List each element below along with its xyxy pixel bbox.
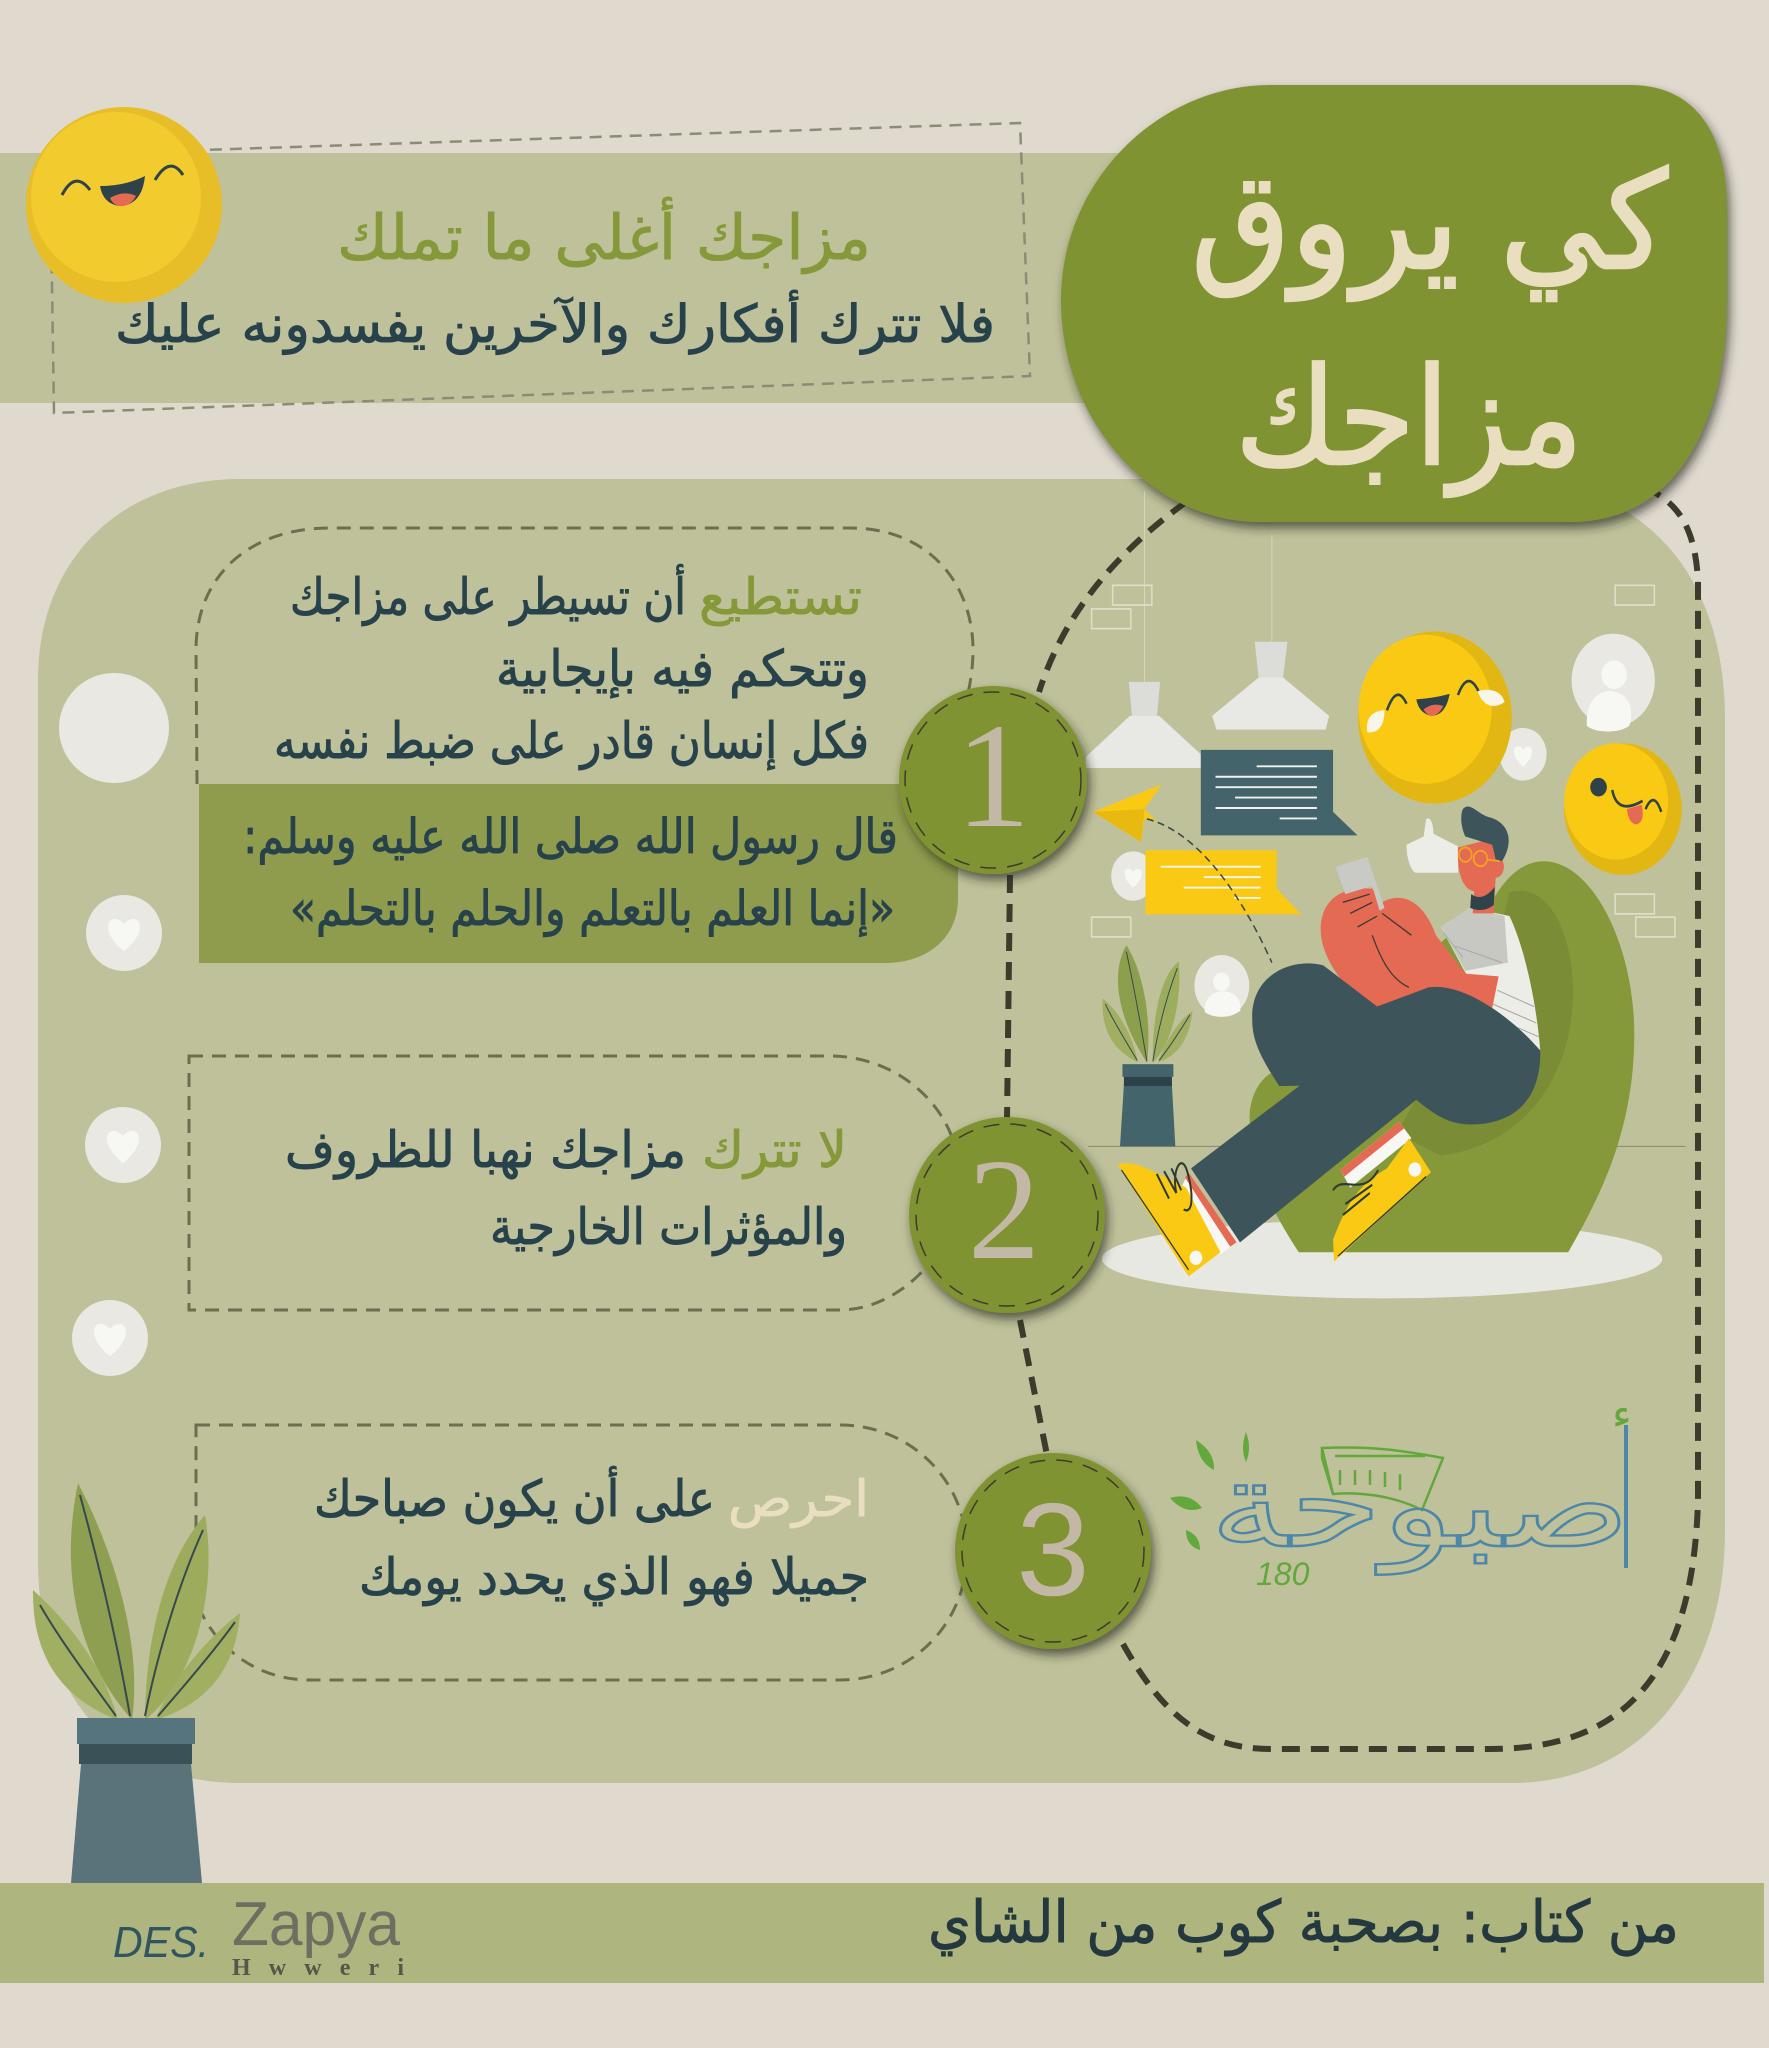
title line 1: كي يروق <box>1191 143 1669 302</box>
footer source text: من كتاب: بصحبة كوب من الشاي <box>928 1888 1679 1957</box>
floor line <box>1088 1145 1686 1147</box>
title line 2: مزاجك <box>1235 339 1583 497</box>
tip 1 highlighted word: تستطيع <box>699 568 862 627</box>
icon: paper plane <box>1093 784 1272 963</box>
icon: laughing emoji large <box>1358 631 1512 804</box>
glasses <box>1459 847 1500 866</box>
man figure <box>1118 807 1540 1276</box>
wall bricks <box>1092 585 1675 937</box>
head <box>1458 839 1504 913</box>
number badge 2 <box>909 1117 1105 1313</box>
icon: laughing emoji top <box>26 107 222 303</box>
tip 1 line 2: وتتحكم فيه بإيجابية <box>496 640 869 699</box>
number badge 2: 2 <box>968 1130 1040 1290</box>
back leg <box>1252 963 1429 1086</box>
icon: winking emoji <box>1564 743 1682 875</box>
tip 1 line 3: فكل إنسان قادر على ضبط نفسه <box>274 712 869 771</box>
logo: Osbouha 180 <box>1170 1389 1632 1592</box>
icon: heart bubble left <box>1111 851 1155 901</box>
side decoration: plain circle <box>59 673 169 783</box>
panel: tip 2 <box>189 1056 960 1310</box>
leaves <box>71 1483 134 1720</box>
logo hamza: ء <box>1612 1389 1632 1438</box>
panel: tip 3 <box>196 1425 967 1680</box>
designer credit: Hwweri <box>232 1955 404 1981</box>
designer credit <box>113 1890 404 1981</box>
icon: profile bubble top <box>1572 634 1655 731</box>
banner heading: مزاجك أغلى ما تملك <box>337 197 871 274</box>
tip 2 highlighted word: لا تترك <box>702 1121 847 1179</box>
tip 3 highlighted word: احرص <box>728 1470 869 1528</box>
logo alef <box>1624 1425 1628 1568</box>
icon: small potted plant <box>1103 945 1192 1146</box>
pot <box>77 1718 195 1744</box>
lamps <box>1086 491 1329 768</box>
tip 3 line 2: جميلا فهو الذي يحدد يومك <box>359 1548 869 1607</box>
tip 2 dashed outline <box>189 1056 960 1310</box>
number badge 3 <box>955 1453 1151 1649</box>
title shape <box>1061 85 1727 522</box>
number badge 3: 3 <box>1016 1476 1090 1623</box>
tip 3 dashed outline <box>196 1425 967 1680</box>
left sock <box>1181 1172 1237 1254</box>
phone <box>1336 857 1384 911</box>
number badge 1: 1 <box>956 693 1030 859</box>
logo number: 180 <box>1256 1556 1310 1592</box>
designer credit: DES. <box>113 1918 209 1967</box>
dashed connector path <box>1007 490 1698 1749</box>
logo book icon <box>1322 1447 1443 1510</box>
tip 1 line 1: أن تسيطر على مزاجك <box>290 564 686 626</box>
panel: hadith quote <box>199 784 958 963</box>
icon: teal speech bubble <box>1201 750 1358 835</box>
front leg <box>1191 987 1540 1242</box>
icon: thumbs up <box>1407 818 1458 873</box>
designer credit: Zapya <box>232 1890 400 1959</box>
illustration: man with phone in armchair <box>1086 491 1686 1298</box>
arms and hands <box>1321 888 1499 1020</box>
left shoe <box>1118 1163 1220 1276</box>
icon: heart circle 3 <box>72 1300 148 1376</box>
tip 3 line 1: على أن يكون صباحك <box>314 1466 715 1528</box>
icon: yellow speech bubble <box>1145 850 1301 914</box>
banner subheading: فلا تترك أفكارك والآخرين يفسدونه عليك <box>115 290 995 355</box>
number badge 1 <box>899 686 1087 874</box>
main panel background <box>38 479 1725 1783</box>
tip 2 line 1: مزاجك نهبا للظروف <box>285 1121 686 1180</box>
large potted plant <box>33 1483 240 1883</box>
panel: tip 1 <box>196 528 973 784</box>
footer band <box>0 1883 1764 1983</box>
logo wordmark: صبوحة <box>1210 1436 1630 1575</box>
top banner band <box>0 153 1150 403</box>
logo leaves <box>1170 1432 1249 1550</box>
title badge <box>1061 85 1727 522</box>
shirt <box>1441 908 1540 1050</box>
tip 2 line 2: والمؤثرات الخارجية <box>490 1198 847 1257</box>
quote line 1: قال رسول الله صلى الله عليه وسلم: <box>243 809 898 865</box>
armchair <box>1250 861 1634 1252</box>
banner dashed frame <box>50 123 1030 413</box>
quote background <box>199 784 958 963</box>
tip 1 dashed outline <box>196 528 973 784</box>
icon: heart circle 2 <box>85 1107 161 1183</box>
right sock <box>1340 1122 1411 1188</box>
icon: profile bubble bottom <box>1194 955 1249 1017</box>
floor rug <box>1102 1219 1662 1298</box>
right shoe <box>1333 1138 1431 1262</box>
quote line 2: «إنما العلم بالتعلم والحلم بالتحلم» <box>290 881 895 937</box>
icon: heart circle 1 <box>86 895 162 971</box>
icon: heart bubble right <box>1500 728 1547 781</box>
